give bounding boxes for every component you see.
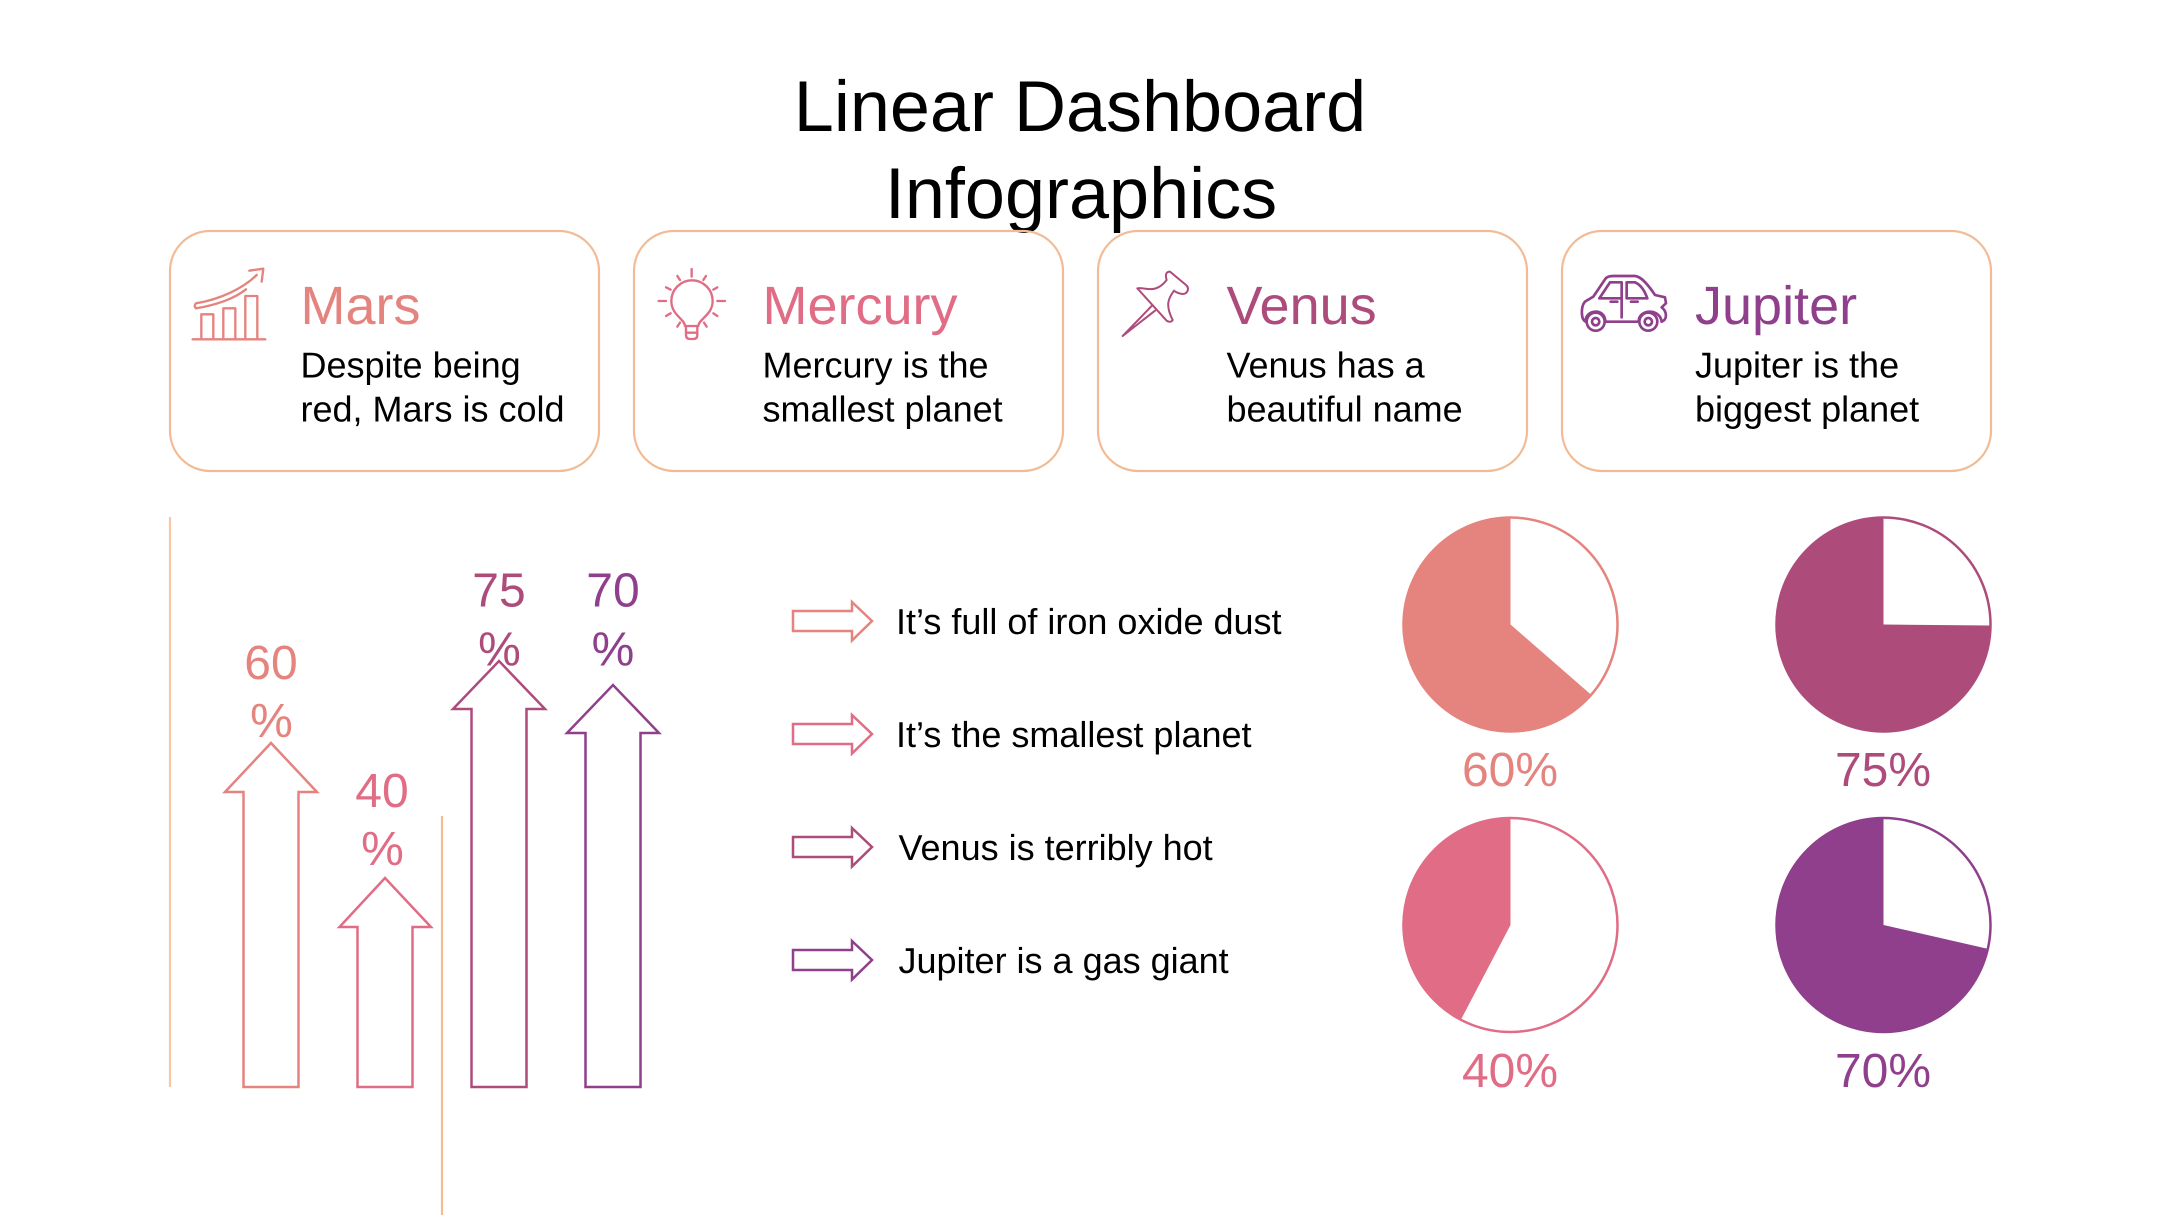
panel: Venus xyxy=(1098,231,1527,471)
value: 70%: 70 xyxy=(586,564,640,618)
text: Jupiter description xyxy=(1695,344,1919,430)
heading: Venus: Venus xyxy=(1226,276,1377,336)
text: Mercury description: smallest planet xyxy=(762,388,1003,430)
icon: rising bar chart xyxy=(193,269,265,339)
value: 60%: % xyxy=(250,695,293,748)
panel: Mercury xyxy=(634,231,1063,471)
arrow: Mars xyxy=(793,602,872,640)
text: Mars description: red, Mars is cold xyxy=(300,388,565,430)
value: 75%: 75 xyxy=(472,564,526,618)
value: 75%: 75% xyxy=(1835,744,1931,797)
value: 60%: 60 xyxy=(244,637,298,690)
second axis line xyxy=(441,816,443,1215)
value: 75%: % xyxy=(478,624,521,676)
list item: Venus hot: Venus is terribly hot xyxy=(898,827,1213,868)
pie chart: 75% xyxy=(1776,517,1991,797)
list item: smallest planet: It’s the smallest planet xyxy=(896,714,1252,755)
value: 40% xyxy=(355,765,409,876)
pie chart: 60% xyxy=(1404,517,1618,797)
arrow: Venus xyxy=(793,828,872,866)
icon: push pin xyxy=(1123,272,1188,336)
panel: Jupiter xyxy=(1562,231,1991,471)
panel: Mars xyxy=(170,231,599,471)
value: 40%: % xyxy=(361,823,404,876)
bar: Mars 60% up arrow xyxy=(225,637,317,1087)
arrow: Mercury xyxy=(793,715,872,754)
heading: Jupiter: Jupiter xyxy=(1695,276,1857,336)
value: 60%: 60% xyxy=(1462,744,1558,797)
value: 70%: % xyxy=(592,624,634,676)
text: Venus description: Venus has a xyxy=(1226,344,1426,386)
value: 60% xyxy=(244,637,298,748)
text: Jupiter description: Jupiter is the xyxy=(1695,344,1899,386)
title: Infographics xyxy=(885,154,1277,234)
title: Linear Dashboard xyxy=(794,67,1366,147)
heading: Mercury: Mercury xyxy=(762,276,958,336)
text: Jupiter description: biggest planet xyxy=(1695,388,1919,430)
bar: Jupiter 70% up arrow xyxy=(567,564,659,1087)
list item: iron oxide dust: It’s full of iron oxide dust xyxy=(896,601,1282,642)
text: Mars description: Despite being xyxy=(300,344,521,386)
left axis line xyxy=(169,517,171,1087)
bar: Venus 75% up arrow xyxy=(453,564,545,1087)
text: Venus description: beautiful name xyxy=(1226,388,1463,430)
icon: car xyxy=(1582,276,1666,331)
pie chart: 70% xyxy=(1776,818,1990,1098)
text: Mercury description: Mercury is the xyxy=(762,344,989,386)
arrow: Jupiter xyxy=(793,941,872,980)
value: 75% xyxy=(472,564,526,676)
value: 40%: 40% xyxy=(1462,1045,1558,1098)
text: Venus description xyxy=(1226,344,1463,430)
text: Mercury description xyxy=(762,344,1003,430)
title xyxy=(794,67,1366,234)
list item: gas giant: Jupiter is a gas giant xyxy=(898,940,1229,981)
pie chart: 40% xyxy=(1402,817,1618,1098)
heading: Mars: Mars xyxy=(300,276,420,336)
text: Mars description xyxy=(300,344,565,430)
icon: light bulb xyxy=(659,269,725,339)
value: 70% xyxy=(586,564,640,676)
bar: Mercury 40% up arrow xyxy=(340,765,431,1087)
value: 40%: 40 xyxy=(355,765,409,818)
value: 70%: 70% xyxy=(1835,1045,1931,1098)
